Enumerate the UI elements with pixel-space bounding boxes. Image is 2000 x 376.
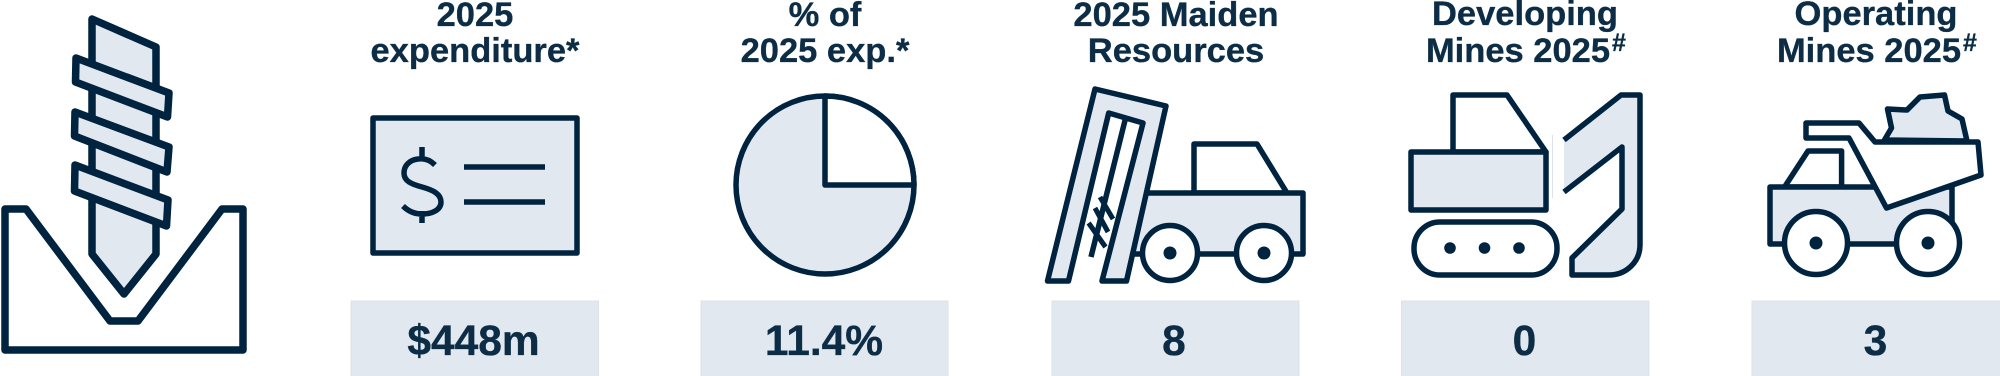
value box: 0: 0 (1513, 318, 1536, 365)
icon: pie chart (736, 96, 914, 274)
value box: 3: 3 (1864, 318, 1887, 365)
value box: 0 (1402, 301, 1649, 376)
icon: drill bit entering rock (5, 19, 243, 350)
icon: dump truck (1770, 95, 1981, 274)
heading: 2025 expenditure: expenditure* (371, 32, 580, 70)
icon: excavator (1411, 95, 1640, 275)
heading: Developing Mines 2025: # (1612, 29, 1626, 57)
heading: Operating Mines 2025: # (1963, 29, 1977, 57)
panel: operating mines 2025 (1752, 0, 2000, 376)
icon: drill rig truck (1048, 89, 1303, 281)
heading: percent of 2025 exp: 2025 exp.* (741, 32, 910, 70)
value box: 11.4%: 11.4% (765, 318, 883, 365)
panel: 2025 maiden resources (1048, 0, 1303, 376)
panel: percent of 2025 expenditure (701, 0, 948, 376)
value box: 11.4% (701, 301, 948, 376)
value box: $448m (351, 301, 598, 376)
value box: $448m: $448m (407, 318, 540, 365)
heading: Developing Mines 2025: Mines 2025 (1426, 32, 1610, 70)
value box: 3 (1752, 301, 2000, 376)
icon: banknote with dollar sign (373, 118, 577, 253)
panel: 2025 expenditure (351, 0, 598, 376)
heading: 2025 Maiden Resources: Resources (1088, 32, 1264, 70)
panel: developing mines 2025 (1402, 0, 1649, 376)
heading: Operating Mines 2025: Mines 2025 (1777, 32, 1961, 70)
value box: 8 (1052, 301, 1299, 376)
value box: 8: 8 (1162, 318, 1186, 365)
